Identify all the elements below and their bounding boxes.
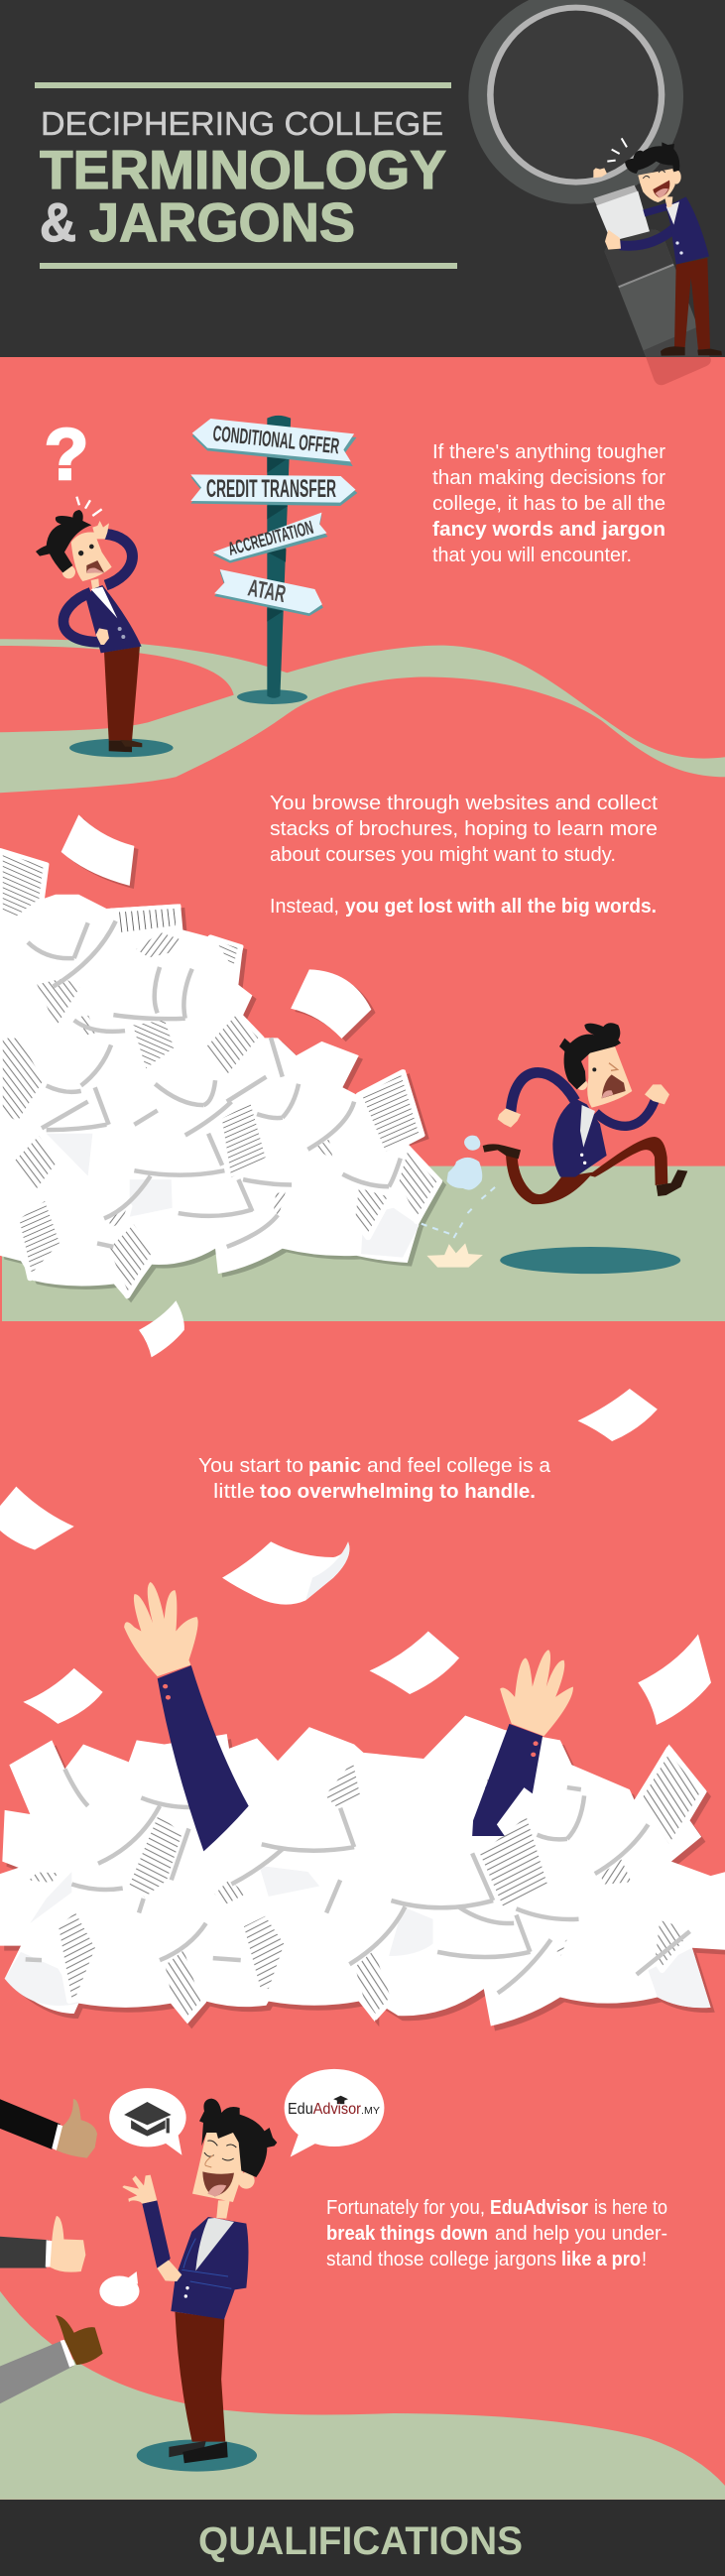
text block: eduadvisor: stand those college jargons bbox=[326, 2249, 556, 2270]
paper pile bbox=[0, 1665, 725, 2030]
text block: panic: too overwhelming to handle. bbox=[260, 1481, 536, 1503]
floating papers bbox=[0, 1389, 711, 1725]
green hill bbox=[0, 2291, 725, 2500]
sign label: credit transfer: CREDIT TRANSFER bbox=[206, 475, 336, 503]
title: DECIPHERING COLLEGE bbox=[41, 105, 443, 142]
speech bubble: eduadvisor logo: EduAdvisor bbox=[288, 2101, 361, 2118]
text block: eduadvisor: EduAdvisor bbox=[490, 2197, 588, 2219]
panel: paper pile chase scene bbox=[0, 793, 725, 1357]
icon: question mark: ? bbox=[45, 415, 88, 495]
text block: panic: and feel college is a bbox=[367, 1455, 551, 1477]
right sleeve foreground bbox=[472, 1724, 543, 1836]
text block: browsing: Instead, bbox=[270, 896, 339, 918]
text block: browsing: stacks of brochures, hoping to learn more bbox=[270, 818, 658, 840]
upper body bbox=[122, 2099, 277, 2319]
panel: qualifications footer bbox=[0, 2500, 725, 2576]
text block: panic: You start to bbox=[198, 1455, 303, 1477]
title bbox=[40, 105, 446, 253]
text block: browsing bbox=[270, 793, 658, 918]
floor bbox=[2, 1166, 725, 1321]
right hand reaching up bbox=[500, 1650, 573, 1736]
speech bubble: eduadvisor logo: .MY bbox=[361, 2105, 380, 2117]
text block: intro: than making decisions for bbox=[432, 467, 665, 489]
title: & bbox=[40, 191, 76, 253]
text block: eduadvisor: like a pro bbox=[561, 2249, 641, 2270]
title: JARGONS bbox=[89, 191, 355, 253]
text block: eduadvisor: and help you under- bbox=[495, 2223, 667, 2245]
text block: eduadvisor: break things down bbox=[326, 2223, 488, 2245]
text block: intro: fancy words and jargon bbox=[432, 519, 665, 541]
panel: header bbox=[0, 0, 725, 385]
speech bubble: eduadvisor logo bbox=[285, 2069, 384, 2157]
character: running student bbox=[483, 1023, 687, 1204]
icon: magnifying glass bbox=[468, 0, 711, 385]
text block: intro: college, it has to be all the bbox=[432, 493, 665, 515]
text block: eduadvisor: is here to bbox=[594, 2197, 667, 2219]
left hand reaching up bbox=[124, 1582, 198, 1676]
panel: signpost scene bbox=[0, 415, 725, 793]
left sleeve foreground bbox=[158, 1665, 249, 1851]
legs and shadow bbox=[69, 647, 174, 757]
paper pile bbox=[0, 814, 446, 1357]
character: happy student bbox=[122, 2099, 277, 2472]
signpost bbox=[190, 416, 357, 704]
decorative title rule bottom bbox=[40, 263, 457, 269]
speech bubble: graduation cap bbox=[109, 2088, 186, 2155]
text block: panic bbox=[198, 1455, 551, 1503]
sign label: conditional offer: CONDITIONAL OFFER bbox=[211, 421, 340, 458]
speech bubble: small empty bbox=[99, 2271, 140, 2306]
text block: intro bbox=[432, 441, 665, 566]
text block: panic: panic bbox=[308, 1455, 361, 1477]
text block: eduadvisor bbox=[326, 2197, 667, 2270]
text block: panic: little bbox=[213, 1481, 255, 1503]
legs and shadow bbox=[137, 2312, 257, 2472]
text block: browsing: about courses you might want to study. bbox=[270, 844, 616, 866]
sign label: atar: ATAR bbox=[246, 574, 288, 608]
text block: eduadvisor: Fortunately for you, bbox=[326, 2197, 485, 2219]
footer heading: QUALIFICATIONS bbox=[198, 2519, 523, 2563]
character: confused student bbox=[36, 497, 174, 757]
text block: browsing: You browse through websites and collect bbox=[270, 793, 658, 814]
character: laughing student holding magnifier bbox=[593, 138, 722, 356]
text block: eduadvisor: ! bbox=[642, 2249, 647, 2270]
decorative title rule top bbox=[35, 82, 451, 88]
winding path bbox=[0, 639, 725, 793]
panel: eduadvisor closing scene bbox=[0, 2069, 725, 2500]
panel: drowning in paper scene bbox=[0, 1389, 725, 2030]
title: TERMINOLOGY bbox=[40, 139, 446, 200]
upper body bbox=[36, 497, 142, 653]
footprint trail bbox=[422, 1136, 680, 1274]
sign label: accreditation: ACCREDITATION bbox=[226, 518, 315, 560]
text block: intro: that you will encounter. bbox=[432, 545, 632, 566]
text block: intro: If there's anything tougher bbox=[432, 441, 665, 463]
thumbs up hands bbox=[0, 2099, 103, 2403]
header background bbox=[0, 0, 725, 357]
text block: browsing: you get lost with all the big words. bbox=[345, 896, 657, 918]
footer band bbox=[0, 2500, 725, 2576]
